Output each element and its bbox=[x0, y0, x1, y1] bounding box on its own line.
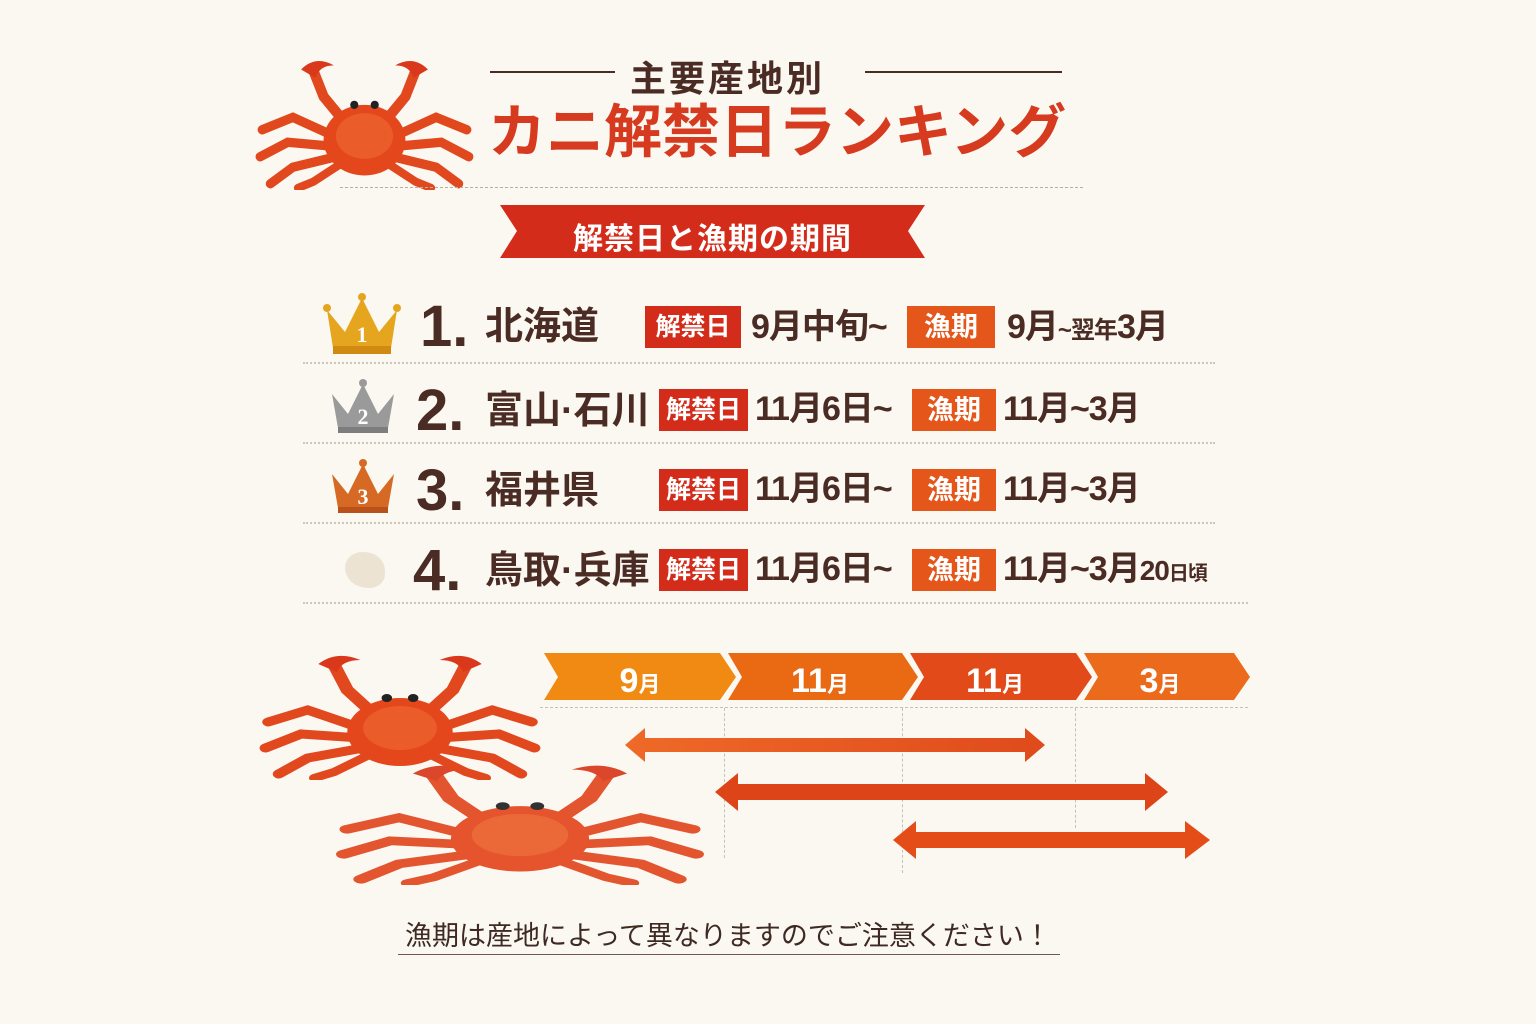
crab: illustration upper bbox=[260, 656, 540, 780]
row 2 bbox=[332, 378, 1140, 443]
row 1: 1. bbox=[420, 294, 468, 359]
row 3: 漁期 bbox=[927, 475, 981, 505]
subtitle: 主要産地別 bbox=[630, 58, 825, 99]
row 3: 3. bbox=[416, 458, 464, 523]
row 3: 11月~3月 bbox=[1003, 470, 1140, 508]
timeline chart: 11月 bbox=[966, 662, 1024, 700]
crab: illustration lower bbox=[336, 766, 704, 885]
row 2: 解禁日 bbox=[666, 396, 741, 424]
row 2: 2. bbox=[416, 378, 464, 443]
row 4 bbox=[345, 538, 1208, 603]
footer note: 漁期は産地によって異なりますのでご注意ください！ bbox=[405, 921, 1051, 951]
ribbon banner bbox=[500, 205, 925, 258]
icon: silver crown bbox=[332, 379, 394, 433]
row 1: 北海道 bbox=[485, 306, 599, 348]
row 1 bbox=[323, 293, 1168, 359]
row 3 bbox=[332, 458, 1140, 523]
row 3: 福井県 bbox=[485, 470, 599, 512]
row 3: 解禁日 bbox=[666, 476, 741, 504]
icon: bronze crown bbox=[332, 459, 394, 513]
row 4: 鳥取·兵庫 bbox=[485, 550, 650, 592]
icon: bronze crown: 3 bbox=[358, 484, 368, 509]
footer note bbox=[398, 912, 1060, 955]
timeline chart: 9月 bbox=[620, 662, 660, 700]
timeline chart bbox=[540, 653, 1250, 873]
row 1: 解禁日 bbox=[655, 313, 730, 341]
row 4: 漁期 bbox=[927, 555, 981, 585]
timeline chart: 11月 bbox=[791, 662, 849, 700]
row 2: 富山·石川 bbox=[485, 390, 650, 432]
icon: gold crown bbox=[323, 293, 401, 354]
row 1: 9月中旬~ bbox=[751, 308, 887, 346]
row 2: 漁期 bbox=[927, 395, 981, 425]
row 1: 9月~翌年3月 bbox=[1007, 308, 1168, 346]
ribbon banner: 解禁日と漁期の期間 bbox=[573, 223, 852, 256]
icon: silver crown: 2 bbox=[358, 404, 368, 429]
icon: faint blob bbox=[345, 552, 385, 588]
crab: title illustration bbox=[256, 61, 474, 190]
row 2: 11月~3月 bbox=[1003, 390, 1140, 428]
timeline chart: 3月 bbox=[1140, 662, 1180, 700]
row 1: 漁期 bbox=[924, 312, 978, 342]
row 4: 解禁日 bbox=[666, 556, 741, 584]
icon: gold crown: 1 bbox=[356, 322, 368, 347]
row 2: 11月6日~ bbox=[755, 390, 892, 428]
row 4: 4. bbox=[413, 538, 461, 603]
row 4: 11月6日~ bbox=[755, 550, 892, 588]
row 3: 11月6日~ bbox=[755, 470, 892, 508]
row 4: 11月~3月20日頃 bbox=[1003, 550, 1207, 588]
title: カニ解禁日ランキング bbox=[488, 100, 1066, 165]
